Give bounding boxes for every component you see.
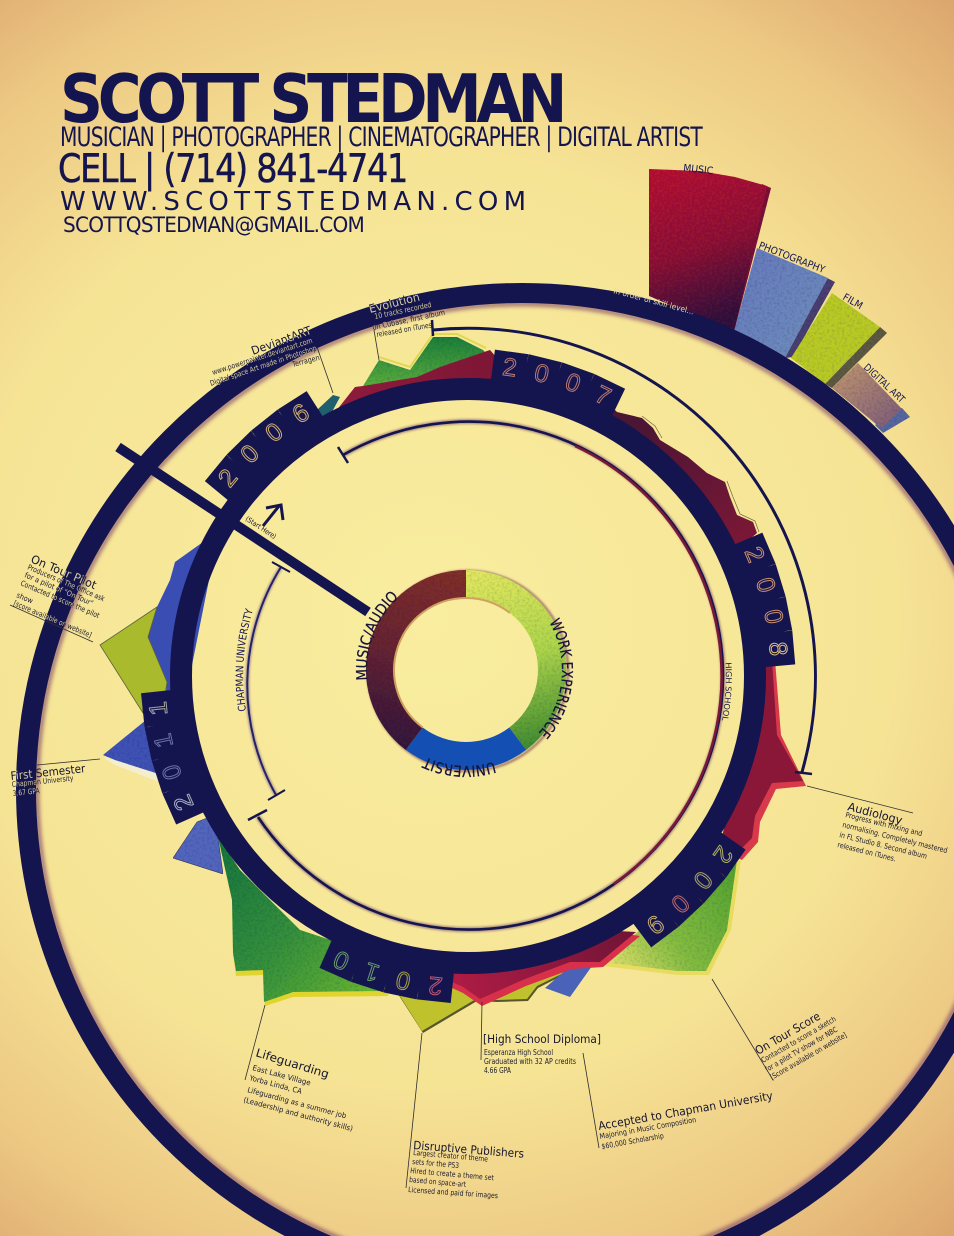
callout: Evolution: Evolution — [367, 290, 421, 316]
arc: Chapman University bracket — [247, 562, 290, 800]
year block: 2009 — [632, 831, 746, 947]
year block: 2009: 9 — [641, 909, 669, 940]
callout: On Tour Pilot: [score available on website] — [12, 599, 93, 640]
callout: High School Diploma: [High School Diploma] — [483, 1032, 601, 1046]
callout: On Tour Score: Contacted to score a sketch — [760, 1014, 838, 1065]
bar: film — [791, 293, 887, 388]
callout: Evolution — [367, 290, 446, 360]
callout: High School Diploma — [481, 1002, 601, 1075]
callout: First Semester: 3.67 GPA — [12, 786, 41, 798]
callout: Audiology — [807, 786, 949, 863]
callout: On Tour Pilot: show — [15, 591, 34, 605]
year block: 2011: 1 — [144, 700, 173, 717]
callout: Audiology: Audiology — [846, 799, 904, 827]
roles: MUSICIAN | PHOTOGRAPHER | CINEMATOGRAPHER | DIGITAL ARTIST — [60, 122, 703, 153]
email: SCOTTQSTEDMAN@GMAIL.COM — [63, 213, 364, 237]
year block: 2006: 2 — [213, 464, 243, 492]
header — [58, 60, 703, 237]
arc: high school outer bracket — [432, 320, 815, 774]
peak: Lifeguarding — [218, 837, 392, 1006]
website: WWW.SCOTTSTEDMAN.COM — [60, 187, 526, 217]
callout: Evolution: on Cubase, first album — [372, 308, 446, 332]
callout: Disruptive Publishers: Licensed and paid for images — [408, 1185, 498, 1200]
callout: Lifeguarding: East Lake Village — [251, 1063, 312, 1088]
year block: 2010: 2 — [427, 971, 444, 1000]
label: photography: PHOTOGRAPHY — [757, 241, 827, 276]
callout: Audiology: released on iTunes. — [837, 840, 897, 863]
year block: 2006: 0 — [260, 417, 289, 448]
peak: First Semester — [103, 720, 162, 781]
label: Chapman University: CHAPMAN UNIVERSITY — [236, 608, 252, 712]
callout: Disruptive Publishers: based on space-art — [409, 1175, 466, 1189]
callout: High School Diploma: Esperanza High School — [484, 1048, 553, 1057]
year block: 2007: 2 — [501, 353, 518, 383]
callout: Disruptive Publishers: Largest creator of theme — [413, 1148, 489, 1164]
bar: music — [649, 169, 771, 332]
callout: Lifeguarding: Lifeguarding — [254, 1045, 331, 1081]
segment: work experience — [466, 570, 566, 750]
callout: Accepted to Chapman University: $60,000 Scholarship — [601, 1131, 665, 1151]
year block: 2010: 0 — [329, 944, 354, 976]
donut label: university: UNIVERSITY — [421, 758, 496, 778]
year block: 2006 — [205, 391, 324, 501]
start pointer bar — [118, 447, 368, 612]
year block: 2007: 7 — [591, 380, 615, 411]
year block: 2010 — [319, 939, 454, 1003]
callout: On Tour Score: On Tour Score — [752, 1009, 823, 1058]
main timeline ring — [181, 389, 755, 963]
segment: music audio — [366, 570, 466, 750]
peak: High School Diploma — [398, 930, 640, 1033]
callout: On Tour Pilot: for a pilot of "On Tour" — [23, 571, 95, 608]
callout: Disruptive Publishers — [406, 1033, 525, 1200]
peak: audio top — [325, 350, 497, 425]
callout: Lifeguarding: Lifeguarding as a summer job — [246, 1085, 348, 1120]
callout: Disruptive Publishers: sets for the PS3 — [412, 1157, 460, 1170]
callout: Accepted to Chapman University: Majoring in Music Composition — [599, 1115, 697, 1141]
callout: On Tour Pilot: On Tour Pilot — [29, 552, 99, 592]
title: SCOTT STEDMAN — [60, 60, 562, 138]
callout: Audiology: Progress with mixing and — [845, 810, 924, 838]
year block: 2008 — [733, 533, 795, 667]
year block: 2011: 0 — [157, 761, 188, 783]
start here label: (Start Here) — [244, 515, 278, 541]
callout: Evolution: 10 tracks recorded — [374, 300, 432, 321]
peak: semester low — [173, 815, 223, 874]
callout: On Tour Pilot — [10, 552, 107, 642]
phone: CELL | (714) 841-4741 — [58, 147, 407, 192]
callout: DeviantART: www.powerpainter.deviantart.com — [211, 336, 313, 377]
label: digital art: DIGITAL ART — [861, 362, 907, 406]
label: music: MUSIC — [683, 163, 714, 177]
label: film: FILM — [840, 292, 864, 312]
callout: DeviantART: Digital space Art made in Photoshop — [209, 343, 318, 388]
year block: 2010: 1 — [361, 956, 383, 987]
year block: 2006: 6 — [288, 398, 314, 429]
year block: 2010: 0 — [394, 965, 413, 995]
callout: First Semester: First Semester — [10, 761, 86, 783]
callout: On Tour Score: for a pilot TV show for NBC — [764, 1025, 839, 1074]
callout: High School Diploma: 4.66 GPA — [484, 1066, 512, 1075]
year block: 2007: 0 — [532, 359, 552, 389]
year block: 2011 — [141, 690, 205, 825]
skill note: In order of skill level... — [612, 286, 695, 316]
year block: 2008: 8 — [763, 641, 792, 657]
callout: Disruptive Publishers: Disruptive Publishers — [413, 1138, 525, 1161]
callout: Lifeguarding: (Leadership and authority skills) — [242, 1095, 354, 1133]
donut label: work experience: WORK EXPERIENCE — [538, 617, 574, 740]
callout: Accepted to Chapman University: Accepted to Chapman University — [597, 1088, 774, 1133]
callout text where it crosses the outer ring — [10, 290, 446, 798]
callout: Disruptive Publishers: Hired to create a theme set — [410, 1166, 494, 1182]
peak: On Tour Score — [603, 860, 741, 975]
year block: 2009: 0 — [688, 866, 718, 894]
callout: DeviantART: DeviantART — [249, 323, 314, 358]
year block: 2009: 0 — [665, 888, 695, 918]
year block: 2008: 0 — [758, 607, 788, 626]
label: high school: HIGH SCHOOL — [722, 663, 732, 720]
segment: university — [406, 728, 526, 770]
year block: 2011: 2 — [168, 790, 200, 815]
peak: DeviantART — [317, 395, 340, 425]
inner rim — [394, 598, 510, 728]
arc: main inner bracket — [248, 422, 723, 930]
peak: semester high — [148, 542, 215, 700]
callout: On Tour Score — [712, 979, 848, 1082]
peak: Audiology — [720, 630, 806, 860]
center donut — [366, 570, 568, 771]
year block: 2007: 0 — [562, 368, 584, 399]
callout: Evolution: released on iTunes — [376, 320, 433, 339]
timeline peaks — [100, 334, 806, 1033]
icon: start arrow — [263, 505, 283, 526]
callout: Accepted to Chapman University — [583, 1053, 774, 1151]
donut shadow — [368, 571, 568, 771]
callout: High School Diploma: Graduated with 32 AP credits — [484, 1057, 576, 1066]
year block: 2007 — [491, 350, 625, 418]
year block: 2008: 2 — [739, 543, 770, 566]
bar: photography — [734, 248, 835, 358]
callout: DeviantART: Terragen — [290, 353, 321, 369]
peak: Evolution — [363, 334, 497, 392]
skill bar chart — [649, 163, 910, 433]
year block: 2008: 0 — [750, 574, 781, 596]
peak: On Tour Pilot — [100, 607, 167, 713]
callout: On Tour Pilot: Producers of The Office ask — [26, 563, 107, 603]
callout: On Tour Score: [Score available on website] — [768, 1030, 848, 1082]
callout: First Semester: Chapman University — [11, 774, 74, 789]
peak: audio right — [600, 395, 759, 575]
year block: 2006: 0 — [235, 439, 265, 469]
donut label: music audio: MUSIC/AUDIO — [356, 592, 397, 680]
year block: 2009: 2 — [707, 841, 738, 868]
bar: digital art — [832, 363, 910, 433]
callout: Lifeguarding: Yorba Linda, CA — [248, 1073, 304, 1096]
callout: Audiology: in FL Studio 8. Second album — [839, 830, 928, 861]
outer ring — [26, 293, 954, 1236]
year block: 2011: 1 — [149, 731, 179, 750]
callout: First Semester — [10, 759, 100, 798]
callout: Lifeguarding — [242, 1005, 354, 1133]
callout: On Tour Pilot: Contacted to score the pilot — [19, 579, 101, 620]
